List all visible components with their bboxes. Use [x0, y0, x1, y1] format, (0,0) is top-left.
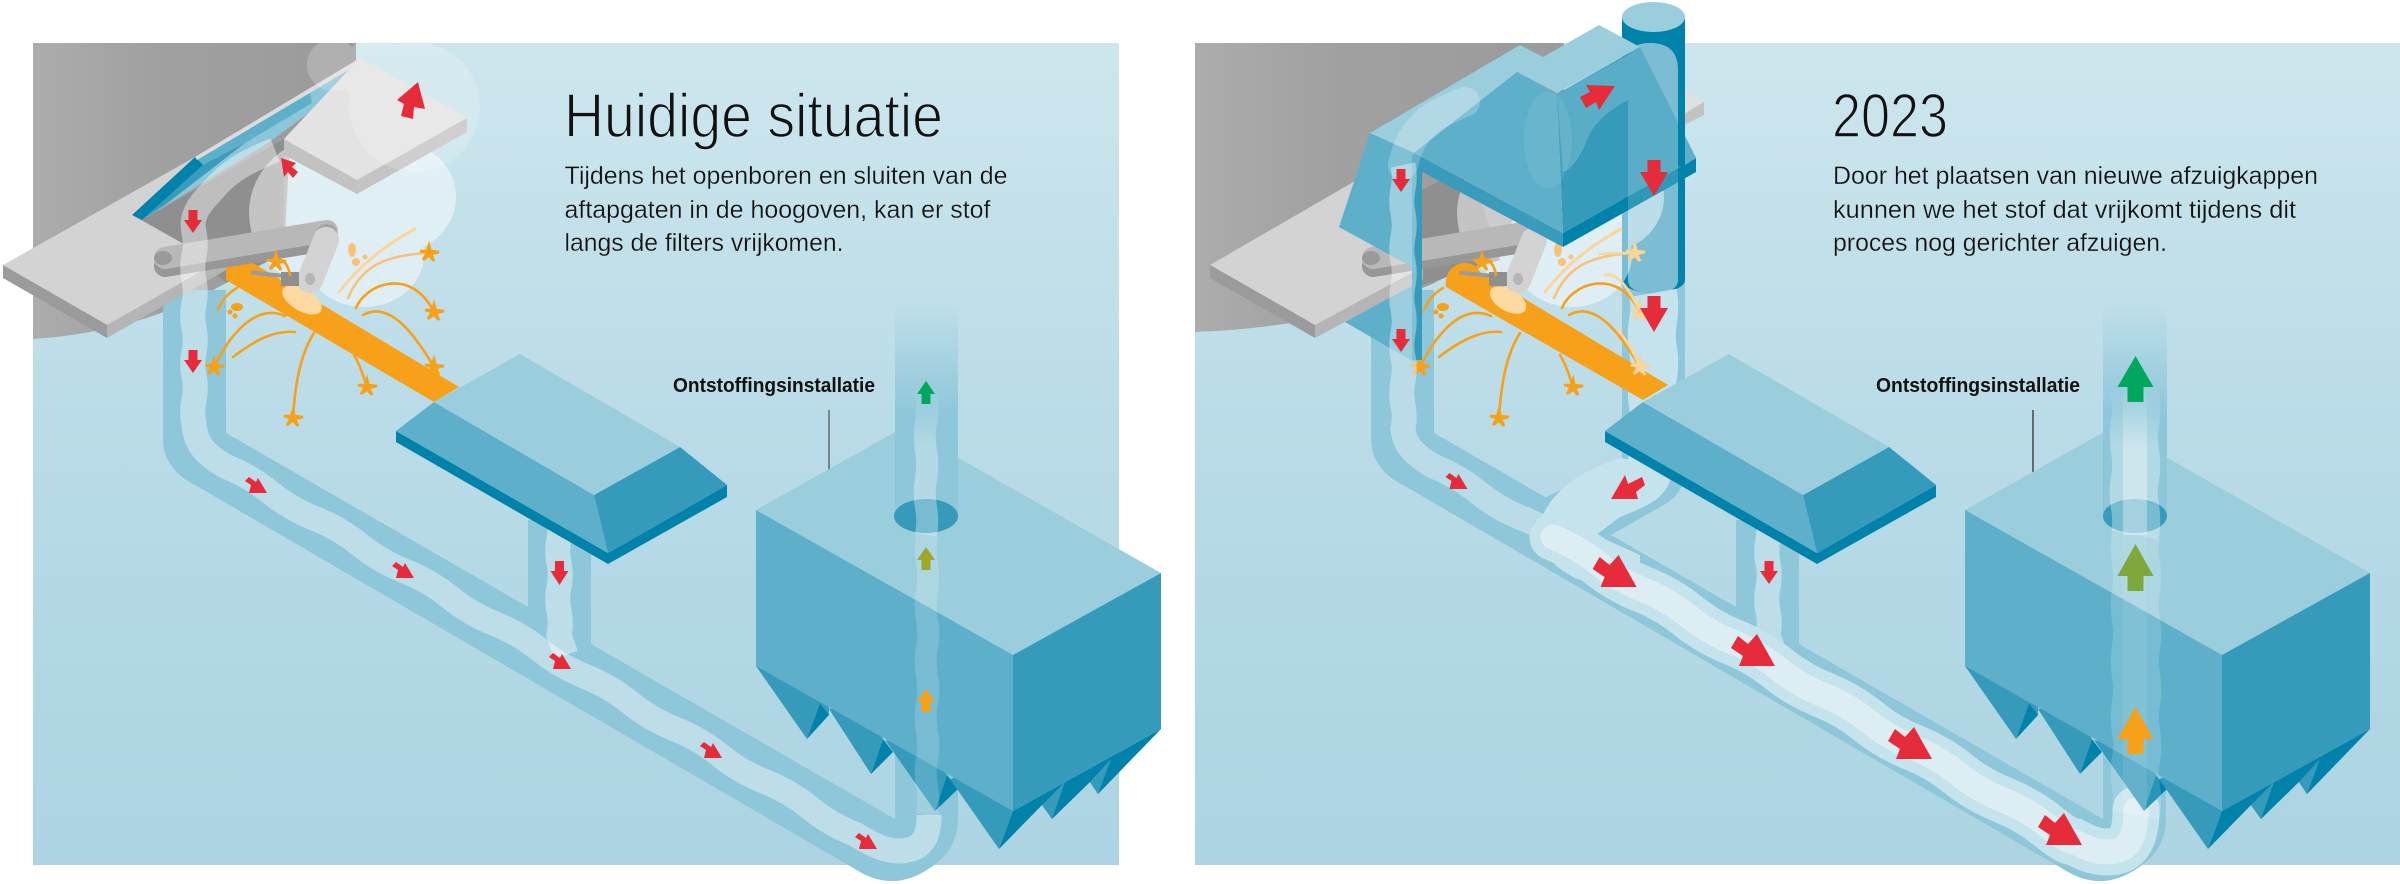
tapping machine arm: [1362, 224, 1544, 286]
body text: Tijdens het openboren en sluiten van de: [564, 162, 1008, 190]
flow core in chimney: [2123, 380, 2147, 535]
shaft under taphole opening: [142, 139, 284, 283]
pale sparks over column: [1600, 245, 1650, 375]
shaft: [1422, 165, 1500, 285]
exhaust column edge: [1678, 20, 1685, 166]
slab hood over runner: [1605, 354, 1936, 564]
body text: langs de filters vrijkomen.: [564, 229, 844, 257]
exhaust column: [1622, 17, 1685, 293]
title: Huidige situatie: [564, 82, 943, 151]
chimney: [895, 305, 958, 516]
branch flow light: [1650, 293, 1654, 470]
body text: aftapgaten in de hoogoven, kan er stof: [564, 196, 991, 224]
label: Ontstoffingsinstallatie: [673, 375, 875, 397]
sparks: [205, 229, 444, 426]
body text: proces nog gerichter afzuigen.: [1833, 229, 2167, 257]
orange iron runner: [226, 263, 459, 402]
sparks: [1411, 229, 1650, 426]
flow core through box: [2123, 535, 2147, 815]
lower dust cloud: [249, 135, 456, 307]
panel background: [33, 43, 1119, 865]
arrow: filtered air olive: [2118, 544, 2154, 591]
body text: kunnen we het stof dat vrijkomt tijdens dit: [1833, 196, 2296, 224]
wide main flow core: [1553, 537, 2136, 852]
label leader line: [2032, 410, 2034, 496]
extraction duct: [1371, 290, 2166, 881]
flow through box: [926, 535, 928, 815]
panel: huidige situatie: [3, 38, 1161, 881]
chimney opening: [894, 499, 958, 533]
flow in chimney: [2134, 367, 2136, 535]
body text: Door het plaatsen van nieuwe afzuigkappen: [1833, 162, 2318, 190]
right floor platform: [284, 58, 467, 194]
junction flow: [1540, 458, 1672, 600]
right floor platform end: [1684, 90, 1704, 125]
blast furnace: [1195, 43, 1564, 332]
dust flow branch: [558, 515, 566, 655]
left floor platform: [1210, 155, 1423, 338]
blue opening in floor: [132, 62, 367, 220]
dust flow over hood: [1403, 102, 1465, 165]
dust flow main: [1402, 165, 1544, 531]
panel background: [1195, 43, 2400, 865]
extraction duct: [163, 290, 958, 881]
red flow arrows: [184, 82, 877, 849]
arrow: filtered air olive: [917, 547, 935, 570]
body text: [1833, 162, 2318, 257]
extraction hood: [1339, 25, 1696, 360]
new extraction branch: [1546, 280, 1685, 560]
exhaust column top: [1622, 2, 1685, 32]
red flow arrows: [1392, 85, 2082, 845]
arrow: dusty air orange: [2118, 707, 2154, 754]
flow through box: [2135, 535, 2137, 815]
body text: [564, 162, 1008, 257]
orange iron runner: [1446, 263, 1668, 400]
arrow: clean air green: [2118, 356, 2154, 402]
dedusting installation box: [756, 427, 1161, 849]
flow inside column: [1628, 43, 1678, 293]
blast furnace: [33, 43, 356, 339]
arrow: clean air green: [917, 381, 935, 404]
flow in chimney: [925, 367, 927, 535]
chimney opening: [2103, 499, 2167, 533]
glow at taphole: [1485, 280, 1531, 320]
lower dust cloud: [1457, 135, 1664, 307]
upper dust cloud: [307, 38, 480, 172]
dedusting installation box: [1965, 427, 2370, 849]
slab hood over runner: [396, 354, 727, 564]
label leader line: [828, 410, 830, 496]
chimney: [2103, 305, 2167, 516]
title: 2023: [1832, 82, 1948, 151]
dust flow main: [193, 150, 929, 851]
arrow: dusty air orange: [917, 689, 935, 712]
glow at taphole: [277, 279, 327, 321]
tapping machine arm: [154, 224, 336, 286]
wide main flow: [1553, 537, 2136, 852]
left floor platform: [3, 58, 362, 338]
panel: 2023: [1195, 2, 2400, 881]
hood corner beyond column: [1685, 136, 1696, 165]
dust flow branch: [1767, 515, 1775, 655]
label: Ontstoffingsinstallatie: [1876, 375, 2080, 397]
hood lower side: [1345, 280, 1422, 362]
